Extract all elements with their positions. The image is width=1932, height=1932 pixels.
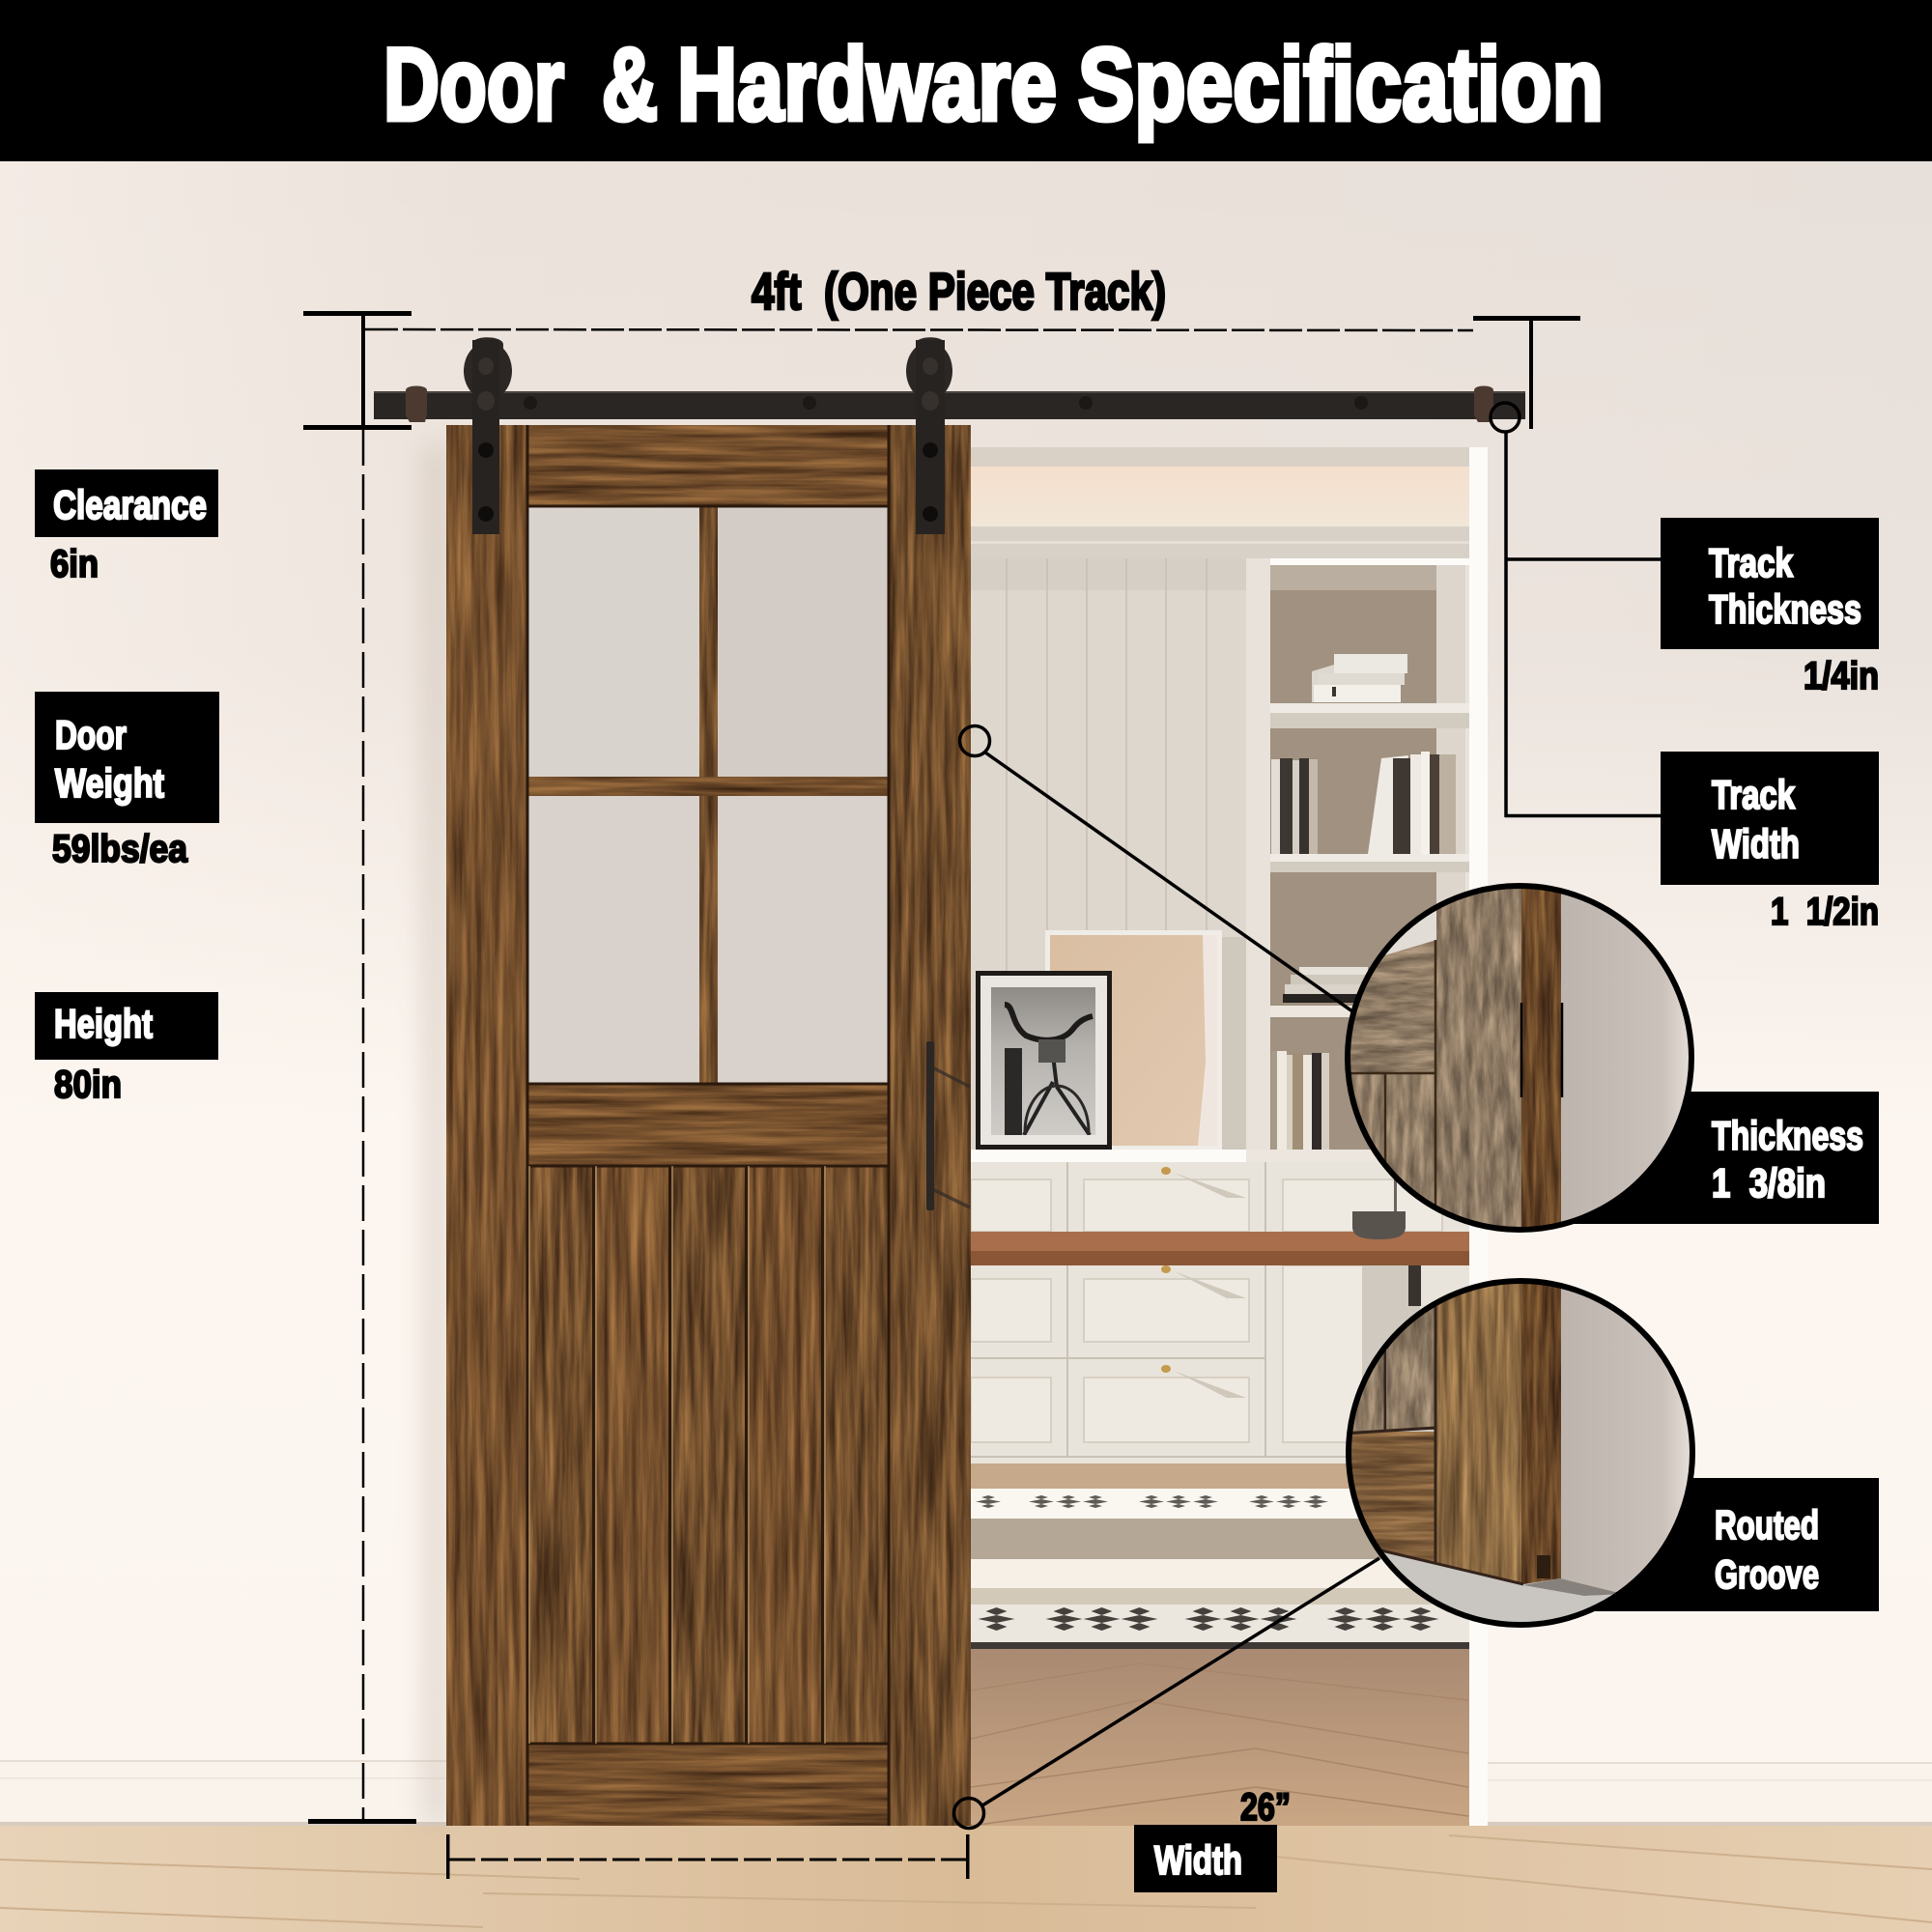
bottom rail xyxy=(527,1744,889,1826)
door handle xyxy=(926,1041,970,1210)
value: door weight: 59lbs/ea xyxy=(52,828,188,870)
leader line to groove detail xyxy=(954,1558,1379,1828)
callout: track thickness xyxy=(1661,518,1879,649)
callout: routed groove: Routed xyxy=(1715,1502,1819,1548)
value: track thickness: 1/4in xyxy=(1804,655,1879,697)
door height dashed dimension xyxy=(308,430,416,1824)
right stile xyxy=(889,425,971,1826)
rug xyxy=(971,1489,1469,1649)
callout: door weight: Door xyxy=(55,712,127,757)
callout: track width: Width xyxy=(1712,821,1800,867)
barn door xyxy=(446,425,971,1826)
framed bicycle photo xyxy=(976,971,1112,1150)
door soft shadow xyxy=(425,444,448,1826)
panel grooves xyxy=(527,425,889,1826)
callout: door width xyxy=(1134,1825,1277,1892)
callout: track width: Track xyxy=(1712,772,1795,817)
value: height: 80in xyxy=(54,1064,122,1106)
baseboard moulding left xyxy=(0,1760,446,1826)
left hanger xyxy=(464,337,512,534)
frosted glass panes xyxy=(527,507,889,1084)
room seen through the doorway xyxy=(971,447,1488,1826)
track length dashed dimension xyxy=(365,316,1580,429)
title banner: Specification xyxy=(1078,26,1604,142)
value: track width: 1 1/2in xyxy=(1771,891,1879,933)
bookcase xyxy=(1246,558,1469,1162)
value: clearance: 6in xyxy=(50,543,99,585)
middle rail xyxy=(527,1084,889,1166)
zoom circle: door thickness xyxy=(1343,877,1700,1238)
track length label: 4ft (One Piece Track) xyxy=(752,263,1166,321)
ceiling trim and glow xyxy=(971,447,1469,558)
track height dimension xyxy=(303,311,412,430)
right stopper xyxy=(1474,386,1493,422)
vertical muntin xyxy=(699,507,718,1084)
callout: door weight: Weight xyxy=(55,760,164,806)
title banner xyxy=(0,0,1932,161)
zoom circle: routed groove xyxy=(1333,1275,1700,1633)
callout: track thickness: Track xyxy=(1709,540,1794,585)
leaning tan art print xyxy=(1045,930,1246,1150)
left stopper xyxy=(406,386,427,422)
title banner: Door xyxy=(384,26,564,142)
back floor xyxy=(971,1463,1469,1489)
sliding track rail xyxy=(374,386,1525,422)
desk bowl xyxy=(1352,1159,1406,1239)
baseboard moulding right xyxy=(1487,1762,1932,1826)
vertical planks xyxy=(528,1166,889,1744)
horizontal muntin xyxy=(528,777,889,796)
callout: thickness: 1 3/8in xyxy=(1712,1160,1826,1206)
top rail xyxy=(527,425,889,506)
callout: thickness: Thickness xyxy=(1712,1113,1863,1158)
panelled wall xyxy=(971,558,1246,1150)
callout: track width xyxy=(1661,752,1879,885)
callout: track thickness: Thickness xyxy=(1709,586,1861,632)
wood floor xyxy=(0,1826,1932,1932)
door opening frame xyxy=(971,447,1488,1826)
cabinets xyxy=(971,1162,1469,1463)
callout: door weight xyxy=(35,692,219,823)
wooden desk top xyxy=(971,1232,1469,1265)
track bolts xyxy=(524,396,1368,410)
title banner: & xyxy=(602,26,658,142)
right hanger xyxy=(906,337,952,534)
callout: door width: Width xyxy=(1154,1837,1242,1883)
leader line to thickness detail xyxy=(960,726,1352,1011)
books xyxy=(1271,654,1456,1150)
callout: routed groove: Groove xyxy=(1715,1551,1819,1597)
title banner: Hardware xyxy=(677,26,1057,142)
callout: height xyxy=(35,992,218,1060)
value: 26 inch: 26” xyxy=(1240,1786,1291,1829)
callout: clearance: Clearance xyxy=(53,482,207,527)
callout: thickness xyxy=(1546,1092,1879,1224)
callout: clearance xyxy=(35,469,218,537)
callout: height: Height xyxy=(54,1001,153,1046)
track leader lines xyxy=(1491,403,1661,817)
herringbone floor xyxy=(971,1649,1469,1826)
door width dimension xyxy=(446,1834,970,1879)
callout: routed groove xyxy=(1546,1478,1879,1611)
left stile xyxy=(446,425,527,1826)
